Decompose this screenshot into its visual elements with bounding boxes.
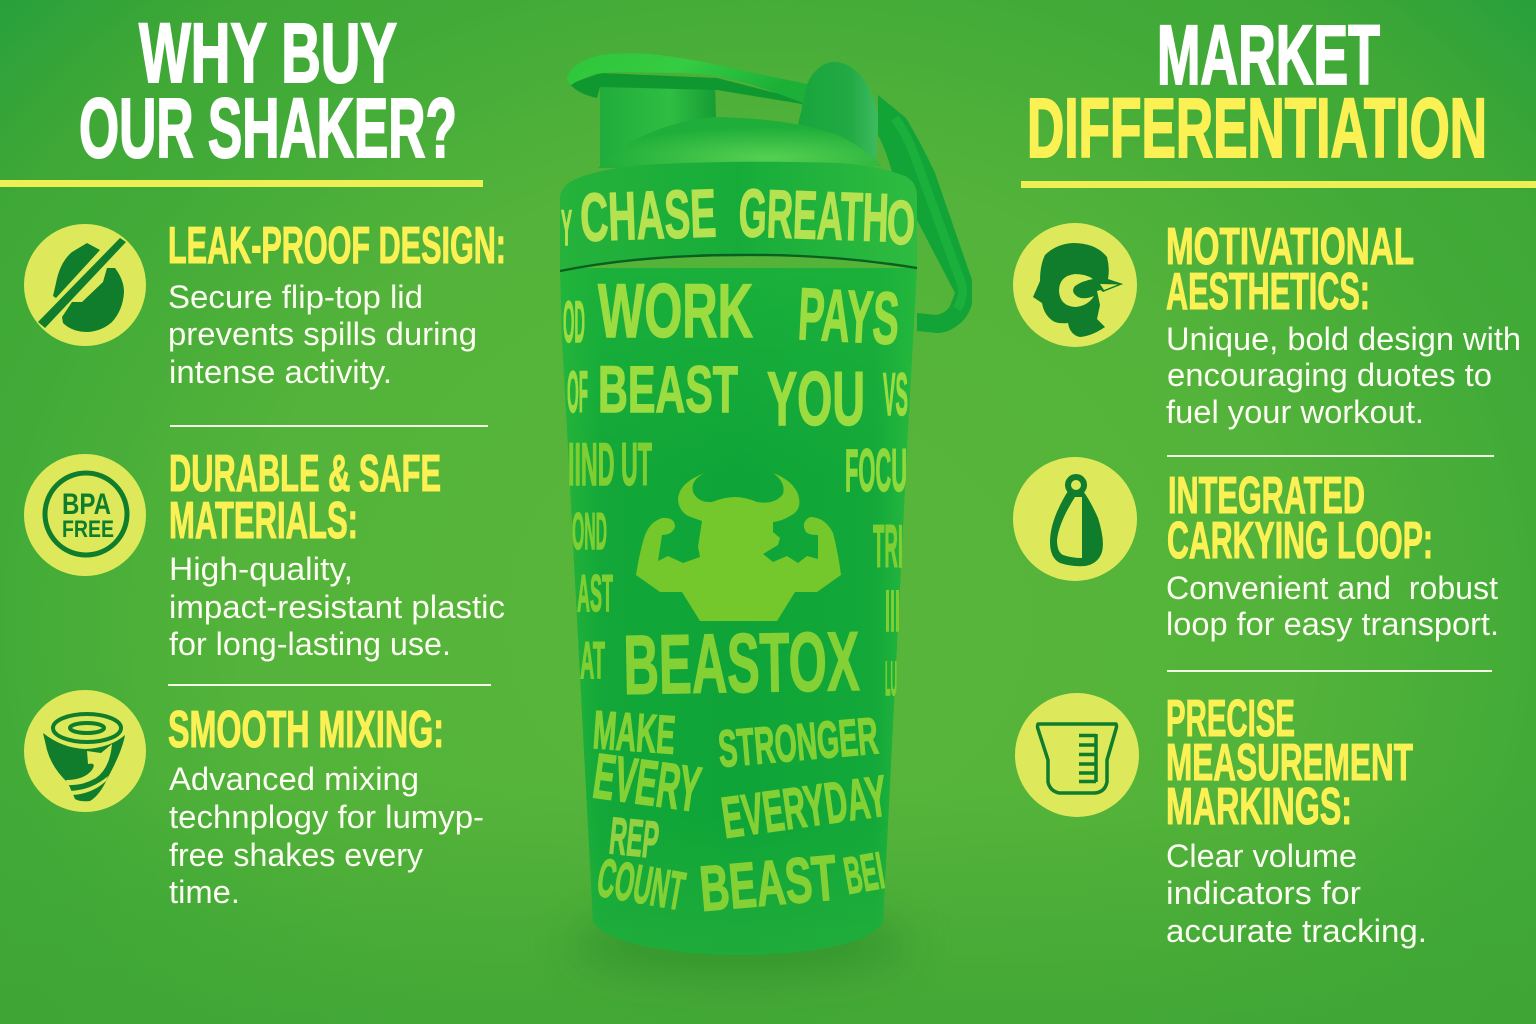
shaker bottle: TRI <box>873 513 903 580</box>
icon: measuring cup <box>1015 693 1139 817</box>
text: smooth mixing: time. <box>169 874 240 910</box>
carrying loop <box>878 95 972 333</box>
item: durable and safe materials <box>24 445 505 662</box>
heading: market differentiation <box>1027 8 1487 175</box>
text: motivational aesthetics: encouraging duotes to <box>1167 357 1492 393</box>
text: precise measurement markings: PRECISE <box>1166 690 1295 748</box>
slogan text on bottle: OND <box>572 503 607 561</box>
text: smooth mixing: technplogy for lumyp- <box>169 799 484 835</box>
text: smooth mixing: SMOOTH MIXING: <box>168 701 444 759</box>
item: smooth mixing <box>24 690 484 910</box>
icon: bpa free: BPA <box>62 488 111 521</box>
flip lid <box>567 53 807 104</box>
thumb tab <box>798 62 878 160</box>
icon: mixing vortex <box>24 690 146 812</box>
text: leak-proof design: LEAK-PROOF DESIGN: <box>168 217 506 275</box>
slogan text on bottle: OF <box>567 360 588 425</box>
text: durable and safe materials: impact-resistant plastic <box>169 589 505 625</box>
text: durable and safe materials <box>169 445 505 662</box>
slogan text on bottle: WORK <box>598 269 753 354</box>
text: motivational aesthetics: Unique, bold design with <box>1166 321 1521 357</box>
slogan text on bottle: AT <box>580 632 605 690</box>
ground shadow <box>570 911 910 979</box>
slogan text on bottle: YOU <box>767 357 865 442</box>
slogan text on bottle: REP <box>607 807 662 870</box>
text: integrated carrying loop: Convenient and robust <box>1166 570 1498 606</box>
text: leak-proof design: Secure flip-top lid <box>168 279 423 315</box>
text: motivational aesthetics: fuel your workout. <box>1166 394 1424 430</box>
slogan text on bottle: PAYS <box>796 272 901 360</box>
neck <box>600 85 716 168</box>
text: leak-proof design: prevents spills during <box>168 316 477 352</box>
slogan text on bottle: BEI <box>840 842 888 906</box>
shaker bottle: FOCU <box>845 437 907 504</box>
text: durable and safe materials: DURABLE & SAFE <box>169 445 441 503</box>
text: smooth mixing: Advanced mixing <box>169 761 419 797</box>
text: integrated carrying loop: loop for easy transport. <box>1166 606 1499 642</box>
shaker bottle: LU <box>885 653 897 706</box>
slogan text on bottle: OD <box>563 290 585 355</box>
text: motivational aesthetics <box>1166 218 1521 430</box>
text: smooth mixing: free shakes every <box>169 837 423 873</box>
text: precise measurement markings: MARKINGS: <box>1166 778 1352 836</box>
panel: why buy our shaker <box>0 6 506 910</box>
text: precise measurement markings: accurate tracking. <box>1166 913 1427 949</box>
shaker bottle: VS <box>883 361 908 428</box>
icon: leak-proof drop <box>24 224 146 346</box>
bull logo <box>636 473 841 621</box>
slogan text on bottle: BEAST <box>697 841 840 925</box>
text: leak-proof design: intense activity. <box>169 354 392 390</box>
slogan text on bottle: STRONGER <box>716 707 880 779</box>
slogan text on bottle: EVERY <box>589 740 705 826</box>
heading: market differentiation: MARKET <box>1157 8 1380 102</box>
text: leak-proof design <box>168 217 506 390</box>
text: durable and safe materials: for long-lasting use. <box>169 626 451 662</box>
slogan text on bottle: O <box>887 189 915 258</box>
item: precise measurement markings <box>1015 690 1427 949</box>
slogan text on bottle: AST <box>577 565 613 623</box>
text: motivational aesthetics: AESTHETICS: <box>1166 263 1370 321</box>
text: precise measurement markings <box>1166 690 1427 949</box>
text: durable and safe materials: High-quality, <box>169 551 353 587</box>
slogan text on bottle: III <box>885 579 900 644</box>
text: durable and safe materials: MATERIALS: <box>169 492 358 550</box>
item: integrated carrying loop <box>1013 457 1499 642</box>
text: smooth mixing <box>168 701 484 910</box>
text: integrated carrying loop <box>1166 467 1499 642</box>
text: integrated carrying loop: INTEGRATED <box>1168 467 1365 525</box>
icon: bpa free <box>24 454 146 576</box>
slogan text on bottle <box>561 175 915 925</box>
slogan text on bottle: Y <box>561 200 572 256</box>
heading underline <box>1021 181 1536 188</box>
slogan text on bottle: CHASE <box>579 175 717 256</box>
item: leak-proof design <box>24 217 506 390</box>
icon: carrying loop <box>1013 457 1137 581</box>
collar <box>560 162 917 272</box>
dome <box>598 117 882 168</box>
slogan text on bottle: EVERYDAY <box>718 763 891 851</box>
heading underline <box>0 180 483 187</box>
heading: why buy our shaker: WHY BUY <box>139 6 397 100</box>
slogan text on bottle: BEASTOX <box>623 614 860 712</box>
collar seam <box>560 255 917 271</box>
heading: why buy our shaker <box>79 6 457 175</box>
slogan text on bottle: BEAST <box>598 352 738 426</box>
slogan text on bottle: IIND UT <box>568 431 652 498</box>
slogan text on bottle: MAKE <box>591 700 677 766</box>
slogan text on bottle: GREATH <box>737 175 890 256</box>
bottle body <box>560 268 917 955</box>
text: precise measurement markings: indicators for <box>1166 875 1361 911</box>
icon: motivated head <box>1013 223 1137 347</box>
text: precise measurement markings: Clear volume <box>1166 838 1357 874</box>
slogan text on bottle: COUNT <box>593 848 689 922</box>
heading: why buy our shaker: OUR SHAKER? <box>79 81 457 175</box>
shaker bottle <box>560 53 972 979</box>
item: motivational aesthetics <box>1013 218 1521 430</box>
icon: bpa free: FREE <box>62 516 114 543</box>
panel: market differentiation <box>1013 8 1536 949</box>
